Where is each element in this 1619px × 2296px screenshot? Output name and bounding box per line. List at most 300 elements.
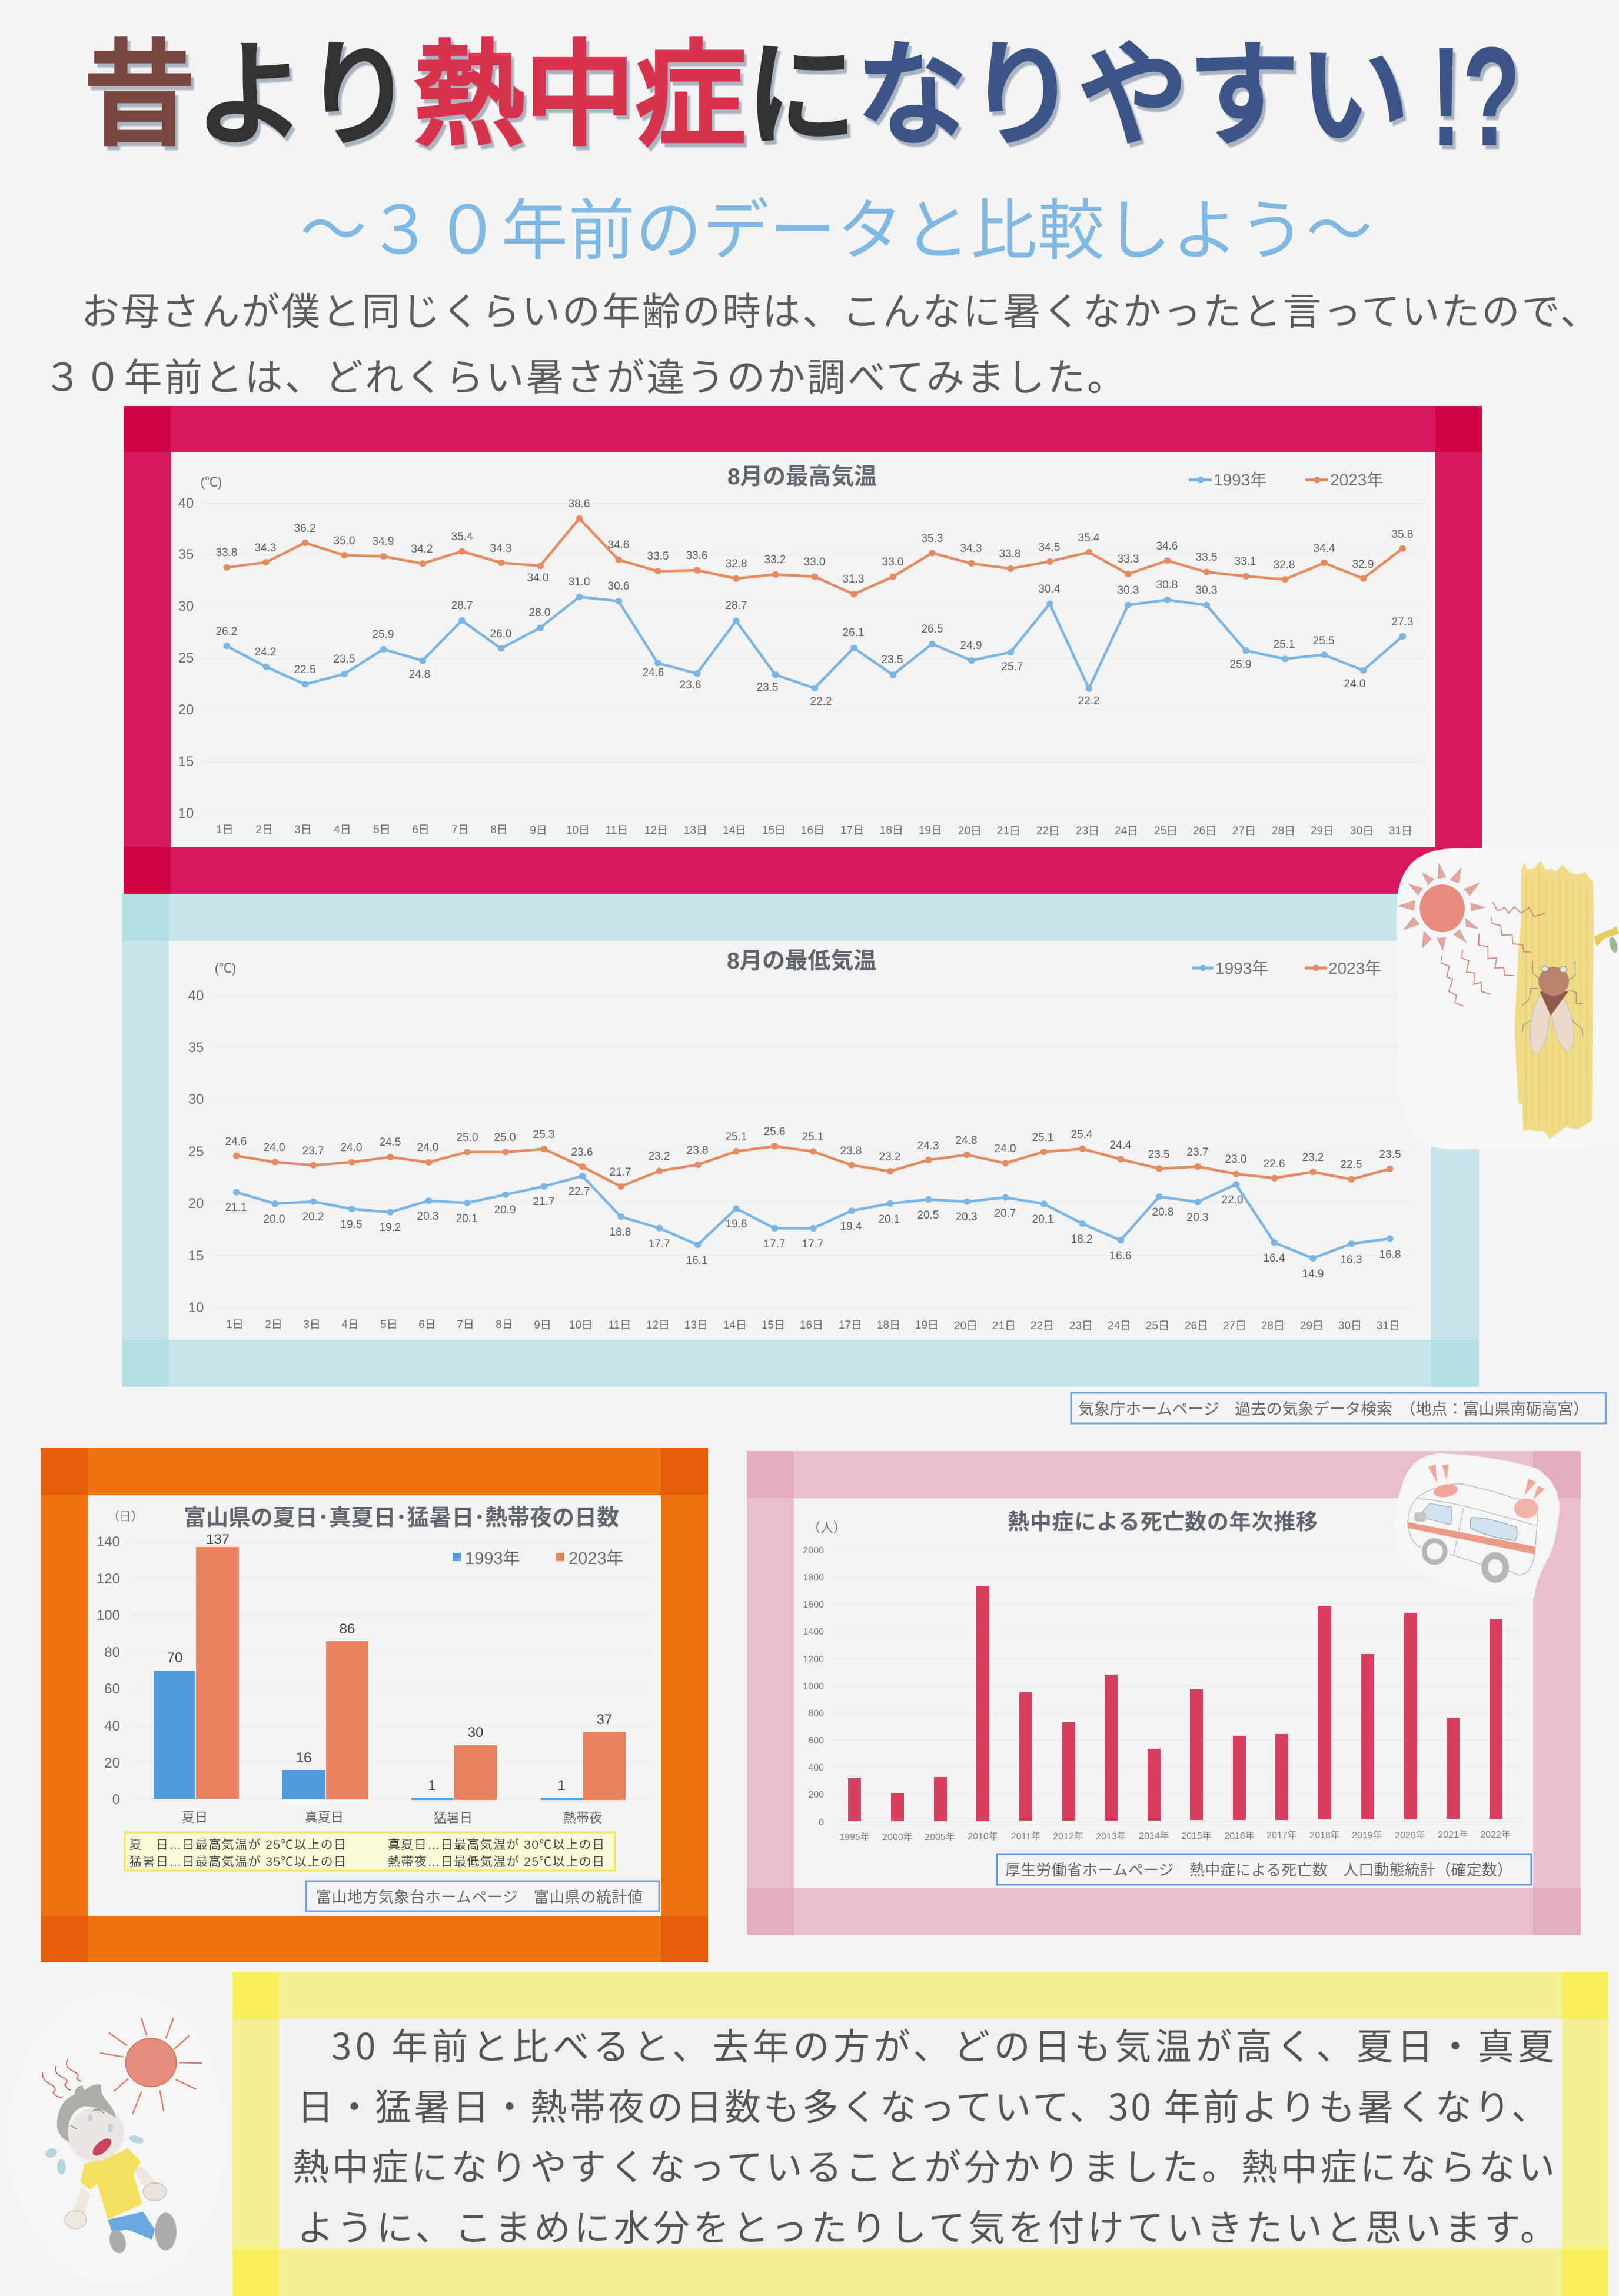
data labels 2023: 33.2 <box>764 554 786 566</box>
data labels 1993: 21.7 <box>533 1196 554 1208</box>
data labels 2023: 23.5 <box>1379 1149 1401 1161</box>
y axis: 1800 <box>803 1573 824 1583</box>
x axis days: 18日 <box>880 824 903 837</box>
data labels 2023: 34.2 <box>411 543 433 555</box>
intro text: お母さんが僕と同じくらいの年齢の時は、こんなに暑くなかったと言っていたので、 <box>81 281 1598 336</box>
x axis days: 28日 <box>1272 825 1295 837</box>
data labels 1993: 23.5 <box>882 654 903 666</box>
x axis days: 24日 <box>1108 1320 1131 1332</box>
bars <box>848 1586 1502 1821</box>
x axis years: 2011年 <box>1011 1831 1040 1842</box>
x axis days: 1日 <box>216 824 234 836</box>
y axis: 400 <box>808 1763 824 1773</box>
x axis years: 2010年 <box>968 1831 998 1842</box>
legend: 1993年 <box>465 1549 520 1568</box>
x axis days <box>216 824 1412 837</box>
title: !? <box>1430 18 1521 175</box>
data labels 1993: 30.4 <box>1039 583 1061 595</box>
data labels 1993: 20.1 <box>879 1213 900 1226</box>
x axis days: 21日 <box>997 825 1020 837</box>
data labels 1993: 25.9 <box>1230 658 1251 671</box>
data labels 2023: 24.0 <box>264 1142 285 1154</box>
y axis: 200 <box>808 1790 824 1800</box>
data labels 2023: 25.1 <box>802 1131 823 1143</box>
data labels 1993: 18.2 <box>1071 1233 1092 1246</box>
x axis years: 2020年 <box>1395 1830 1425 1841</box>
line 1993 <box>227 597 1403 689</box>
source note: weather agency: 気象庁ホームページ 過去の気象データ検索 （地点：富山県南砺高宮） <box>1078 1396 1589 1419</box>
data labels 1993: 24.9 <box>960 640 982 652</box>
data labels 2023: 34.9 <box>373 535 394 548</box>
data labels 2023: 34.3 <box>255 542 276 554</box>
chart title: 熱中症による死亡数の年次推移 <box>1008 1510 1318 1534</box>
data labels 2023: 25.6 <box>764 1126 785 1138</box>
x axis days: 26日 <box>1193 825 1216 837</box>
y axis: 1000 <box>803 1682 824 1692</box>
x axis days: 23日 <box>1076 825 1099 837</box>
bar values: 1 <box>428 1778 436 1793</box>
legend <box>1192 959 1381 977</box>
data labels 2023: 23.7 <box>302 1145 324 1157</box>
x axis years: 2005年 <box>925 1832 955 1842</box>
y axis: 100 <box>97 1608 120 1623</box>
bars 2023 <box>196 1547 626 1800</box>
data labels 1993: 25.5 <box>1313 635 1334 647</box>
data labels 2023: 23.2 <box>879 1151 900 1163</box>
x axis years <box>839 1829 1511 1842</box>
x axis days: 31日 <box>1389 825 1412 837</box>
bar values: 70 <box>167 1650 182 1666</box>
data labels 2023: 23.8 <box>840 1145 862 1157</box>
data labels 2023: 35.3 <box>922 533 943 545</box>
y axis: 30 <box>188 1092 204 1107</box>
data labels 1993: 25.7 <box>1002 661 1023 673</box>
data labels 1993: 26.2 <box>216 625 237 638</box>
data labels 2023: 24.3 <box>917 1140 939 1152</box>
bar values: 137 <box>206 1532 230 1548</box>
y axis: 1200 <box>803 1655 824 1665</box>
data labels 1993: 16.8 <box>1379 1249 1401 1261</box>
chart title: 8月の最高気温 <box>727 464 877 490</box>
data labels 2023: 33.3 <box>1118 553 1139 565</box>
bar values: 86 <box>340 1621 355 1637</box>
x axis days: 15日 <box>762 824 786 837</box>
x axis days: 19日 <box>919 824 942 837</box>
data labels 2023: 24.0 <box>417 1142 438 1154</box>
x axis days: 17日 <box>839 1319 862 1332</box>
bar values: 16 <box>296 1750 311 1766</box>
y axis: 40 <box>104 1718 120 1734</box>
data labels 1993: 25.9 <box>373 628 394 641</box>
data labels 1993: 23.6 <box>680 679 701 691</box>
x axis days: 12日 <box>644 824 668 837</box>
data labels 2023: 33.8 <box>999 548 1020 560</box>
data labels 1993: 19.5 <box>341 1219 362 1231</box>
x axis years: 2019年 <box>1352 1830 1382 1841</box>
data labels 2023: 25.0 <box>457 1132 478 1144</box>
data labels 1993: 24.6 <box>643 667 664 679</box>
data labels 2023: 23.6 <box>571 1146 593 1159</box>
data labels 1993: 22.5 <box>294 664 315 676</box>
data labels 1993: 28.0 <box>529 607 550 619</box>
data labels 2023: 25.0 <box>494 1132 516 1144</box>
data labels 1993: 20.3 <box>417 1210 438 1223</box>
y axis <box>178 475 222 821</box>
data labels 1993: 20.7 <box>995 1207 1016 1220</box>
data labels 2023: 23.7 <box>1187 1146 1208 1159</box>
data labels 1993: 17.7 <box>649 1238 670 1250</box>
x axis days: 27日 <box>1223 1320 1246 1332</box>
y axis: 1400 <box>803 1627 824 1637</box>
categories: 夏日 <box>182 1810 208 1825</box>
legend: 2023年 <box>1330 471 1383 489</box>
x axis days: 5日 <box>373 824 391 836</box>
y axis: 800 <box>808 1709 824 1719</box>
data labels 2023: 24.5 <box>380 1136 401 1149</box>
data labels 2023: 23.2 <box>649 1150 670 1163</box>
data labels 2023 <box>225 1126 1401 1179</box>
legend <box>453 1549 624 1568</box>
x axis days <box>226 1319 1400 1332</box>
x axis years: 2018年 <box>1309 1830 1340 1841</box>
data labels 1993 <box>216 576 1413 708</box>
data labels 1993: 20.2 <box>302 1211 324 1223</box>
x axis days: 23日 <box>1069 1320 1093 1332</box>
categories <box>182 1810 602 1825</box>
x axis days: 2日 <box>265 1319 282 1331</box>
data labels 2023: 25.1 <box>1032 1132 1053 1144</box>
chart title: 富山県の夏日･真夏日･猛暑日･熱帯夜の日数 <box>184 1506 619 1530</box>
data labels 2023: 34.6 <box>608 539 629 551</box>
data labels 1993: 20.9 <box>494 1204 516 1216</box>
data labels 1993: 16.3 <box>1341 1254 1362 1266</box>
x axis days: 13日 <box>684 824 707 837</box>
panel: number of hot days in Toyama <box>41 1448 708 1962</box>
x axis days: 13日 <box>684 1319 708 1332</box>
definitions box: 夏 日…日最高気温が 25℃以上の日 <box>129 1838 346 1852</box>
categories: 熱帯夜 <box>563 1811 602 1825</box>
x axis days: 4日 <box>341 1319 359 1331</box>
y axis: 60 <box>104 1681 120 1697</box>
light blue frame <box>122 894 1479 1387</box>
x axis years: 2016年 <box>1224 1831 1255 1841</box>
data labels 2023: 23.5 <box>1148 1149 1169 1161</box>
x axis days: 24日 <box>1115 825 1138 837</box>
conclusion text: 日・猛暑日・熱帯夜の日数も多くなっていて、30 年前よりも暑くなり、 <box>297 2078 1548 2131</box>
y axis: （日） <box>108 1510 143 1523</box>
data labels 2023: 35.4 <box>1078 532 1100 544</box>
data labels 2023: 32.8 <box>1274 559 1295 571</box>
definitions box <box>125 1832 615 1871</box>
bar values: 1 <box>557 1778 566 1793</box>
data labels 2023: 34.3 <box>490 543 511 555</box>
x axis days: 5日 <box>380 1319 398 1331</box>
data labels 2023: 33.5 <box>647 550 669 563</box>
data labels 1993: 20.5 <box>917 1209 939 1222</box>
line 2023 <box>237 1146 1390 1187</box>
data labels 1993: 14.9 <box>1302 1268 1324 1280</box>
data labels 1993: 17.7 <box>802 1238 823 1250</box>
x axis days: 31日 <box>1377 1320 1400 1332</box>
x axis days: 9日 <box>534 1319 551 1332</box>
data labels 2023: 32.8 <box>726 558 747 570</box>
x axis days: 18日 <box>877 1319 900 1332</box>
y axis: 25 <box>178 650 194 666</box>
x axis days: 29日 <box>1300 1320 1324 1332</box>
data labels 1993: 16.4 <box>1264 1252 1285 1265</box>
y axis: 600 <box>808 1736 824 1746</box>
x axis days: 17日 <box>840 824 864 837</box>
data labels 2023: 34.5 <box>1039 541 1060 554</box>
panel: heatstroke deaths by year <box>747 1451 1581 1935</box>
source note: Toyama observatory <box>306 1881 659 1911</box>
data labels 1993: 24.8 <box>409 668 430 681</box>
data labels 2023: 36.2 <box>294 523 315 535</box>
data labels 1993: 21.1 <box>225 1202 247 1214</box>
data labels 2023: 21.7 <box>610 1166 631 1179</box>
data labels 1993: 22.2 <box>1078 695 1099 707</box>
y axis: 40 <box>188 988 204 1004</box>
y axis: 25 <box>188 1144 204 1160</box>
data labels 1993: 19.2 <box>380 1222 401 1234</box>
y axis: 40 <box>178 495 194 511</box>
x axis days: 15日 <box>762 1319 785 1332</box>
y axis: 20 <box>104 1755 120 1771</box>
illustration: sun and cicada on tree <box>1397 846 1619 1149</box>
bar values <box>167 1532 612 1793</box>
data labels 1993: 20.3 <box>1187 1212 1208 1224</box>
panel: August minimum temperature <box>122 894 1479 1387</box>
x axis days: 8日 <box>490 824 508 836</box>
data labels 2023: 32.9 <box>1352 558 1374 571</box>
data labels 2023: 33.1 <box>1235 555 1256 568</box>
data labels 2023: 25.3 <box>533 1129 554 1141</box>
data labels 1993: 26.5 <box>922 623 943 635</box>
data labels 1993: 16.1 <box>686 1255 707 1267</box>
line 2023 <box>227 518 1403 595</box>
data labels 1993: 20.0 <box>264 1213 285 1226</box>
data labels 1993: 24.2 <box>255 646 276 658</box>
definitions box: 真夏日…日最高気温が 30℃以上の日 <box>388 1838 604 1852</box>
data labels 1993: 22.0 <box>1222 1194 1243 1206</box>
y axis: 10 <box>188 1300 204 1316</box>
y axis: 10 <box>178 806 194 821</box>
data labels 2023: 31.3 <box>843 573 864 585</box>
source note: health ministry <box>997 1854 1531 1885</box>
orange frame <box>41 1448 708 1962</box>
x axis days: 20日 <box>958 825 982 837</box>
data labels 2023: 34.3 <box>960 543 982 555</box>
data labels 2023: 24.0 <box>995 1143 1016 1155</box>
data labels 1993: 27.3 <box>1392 616 1413 628</box>
x axis days: 30日 <box>1350 825 1374 837</box>
crimson frame <box>124 406 1482 894</box>
data labels 2023 <box>216 498 1413 585</box>
data labels 2023: 34.6 <box>1156 540 1178 553</box>
source note: health ministry: 厚生労働省ホームページ 熱中症による死亡数 人口動態統計（確定数） <box>1005 1858 1512 1880</box>
y axis: 0 <box>819 1818 824 1828</box>
data labels 1993: 20.1 <box>456 1213 477 1225</box>
data labels 1993: 18.8 <box>610 1226 631 1239</box>
data labels 1993: 30.8 <box>1156 579 1178 591</box>
data labels 1993: 28.7 <box>451 600 473 612</box>
data labels 2023: 25.4 <box>1071 1129 1093 1141</box>
x axis days: 29日 <box>1311 825 1334 837</box>
x axis days: 25日 <box>1146 1320 1169 1332</box>
x axis days: 3日 <box>294 824 312 836</box>
x axis days: 9日 <box>530 824 547 837</box>
categories: 猛暑日 <box>434 1811 473 1825</box>
data labels 1993: 26.1 <box>843 627 864 639</box>
y axis <box>97 1510 143 1808</box>
data labels 1993 <box>225 1186 1401 1280</box>
data labels 1993: 24.0 <box>1344 678 1365 690</box>
x axis years: 1995年 <box>839 1832 870 1842</box>
conclusion text: ように、こまめに水分をとったりして気を付けていきたいと思います。 <box>297 2198 1557 2251</box>
data labels 2023: 24.8 <box>956 1134 977 1147</box>
bar values: 30 <box>468 1725 483 1741</box>
x axis days: 8日 <box>496 1319 513 1331</box>
x axis years: 2013年 <box>1096 1831 1126 1842</box>
data labels 1993: 19.4 <box>840 1220 862 1233</box>
x axis years: 2012年 <box>1053 1831 1083 1842</box>
yellow frame <box>232 1972 1608 2296</box>
legend: 1993年 <box>1214 471 1266 489</box>
data labels 1993: 23.5 <box>757 681 778 694</box>
data labels 2023: 35.4 <box>451 531 473 543</box>
illustration: boy with heatstroke <box>8 1990 228 2286</box>
x axis days: 3日 <box>303 1319 321 1331</box>
conclusion text: 30 年前と比べると、去年の方が、どの日も気温が高く、夏日・真夏 <box>331 2017 1554 2070</box>
x axis days: 25日 <box>1154 825 1178 837</box>
y axis: 80 <box>104 1645 120 1661</box>
x axis days: 11日 <box>609 1319 631 1332</box>
x axis years: 2015年 <box>1181 1831 1212 1841</box>
panel: conclusion <box>232 1972 1608 2296</box>
x axis years: 2017年 <box>1266 1830 1297 1841</box>
y axis <box>803 1520 846 1828</box>
data labels 2023: 23.2 <box>1302 1152 1324 1164</box>
data labels 2023: 33.0 <box>804 556 825 568</box>
legend: 1993年 <box>1215 959 1268 977</box>
y axis: 20 <box>178 702 194 718</box>
data labels 2023: 25.1 <box>726 1131 747 1143</box>
data labels 2023: 22.6 <box>1264 1158 1285 1170</box>
y axis: 2000 <box>803 1546 824 1556</box>
x axis years: 2000年 <box>882 1832 913 1842</box>
x axis days: 16日 <box>800 1319 823 1332</box>
x axis days: 22日 <box>1036 825 1060 837</box>
data labels 1993: 26.0 <box>490 628 511 640</box>
x axis days: 19日 <box>915 1319 939 1332</box>
data labels 2023: 34.0 <box>527 572 548 584</box>
panel: August maximum temperature <box>124 406 1482 894</box>
data labels 1993: 23.5 <box>334 653 355 665</box>
data labels 1993: 25.1 <box>1274 638 1295 651</box>
data labels 2023: 22.5 <box>1341 1159 1362 1171</box>
x axis days: 26日 <box>1185 1320 1208 1332</box>
x axis days: 14日 <box>723 1319 747 1332</box>
data labels 1993: 31.0 <box>569 576 590 588</box>
data labels 2023: 33.5 <box>1196 551 1217 564</box>
y axis: 15 <box>178 754 194 770</box>
x axis days: 21日 <box>992 1320 1016 1332</box>
data labels 2023: 38.6 <box>569 498 590 510</box>
intro text <box>44 281 1598 402</box>
data labels 1993: 19.6 <box>726 1218 747 1230</box>
conclusion text: 熱中症になりやすくなっていることが分かりました。熱中症にならない <box>292 2138 1555 2191</box>
x axis days: 14日 <box>723 824 746 837</box>
x axis days: 22日 <box>1030 1320 1054 1332</box>
y axis: 15 <box>188 1248 204 1264</box>
x axis days: 28日 <box>1261 1320 1285 1332</box>
data labels 1993: 20.3 <box>956 1211 977 1223</box>
data labels 2023: 23.8 <box>687 1144 708 1157</box>
y axis: 30 <box>178 598 194 614</box>
y axis: 140 <box>97 1534 120 1550</box>
data labels 2023: 24.6 <box>225 1136 247 1148</box>
data labels 2023: 24.4 <box>1110 1139 1132 1152</box>
y axis <box>188 961 236 1316</box>
x axis days: 7日 <box>457 1319 474 1331</box>
x axis days: 20日 <box>954 1320 978 1332</box>
data labels 1993: 30.3 <box>1196 584 1217 597</box>
x axis years: 2021年 <box>1438 1829 1468 1840</box>
data labels 2023: 33.8 <box>216 547 237 559</box>
y axis: （人） <box>807 1520 846 1535</box>
legend: 2023年 <box>569 1549 624 1568</box>
data labels 2023: 33.6 <box>686 550 707 562</box>
data labels 2023: 34.4 <box>1314 543 1335 555</box>
data labels 1993: 22.7 <box>569 1186 590 1198</box>
x axis days: 4日 <box>334 824 351 836</box>
x axis years: 2022年 <box>1480 1829 1511 1840</box>
data labels 2023: 35.0 <box>334 535 355 547</box>
y axis: (℃) <box>215 961 236 976</box>
x axis days: 10日 <box>569 1319 593 1332</box>
data labels 2023: 33.0 <box>882 556 903 568</box>
definitions box: 熱帯夜…日最低気温が 25℃以上の日 <box>388 1855 604 1869</box>
legend <box>1189 471 1383 489</box>
x axis years: 2014年 <box>1139 1831 1169 1841</box>
x axis days: 12日 <box>646 1319 670 1332</box>
y axis: 1600 <box>803 1600 824 1610</box>
data labels 2023: 23.0 <box>1225 1153 1246 1166</box>
x axis days: 1日 <box>226 1319 244 1331</box>
bars 1993 <box>154 1671 583 1800</box>
definitions box: 猛暑日…日最高気温が 35℃以上の日 <box>129 1855 346 1869</box>
chart title: 8月の最低気温 <box>727 949 876 974</box>
y axis: 20 <box>188 1196 204 1212</box>
data labels 1993: 17.7 <box>764 1238 785 1250</box>
data labels 1993: 28.7 <box>726 600 747 612</box>
y axis: 35 <box>188 1040 204 1056</box>
pink frame <box>747 1451 1581 1935</box>
x axis days: 2日 <box>255 824 273 836</box>
y axis: 0 <box>112 1792 120 1808</box>
data labels 1993: 20.1 <box>1032 1213 1053 1226</box>
y axis: 35 <box>178 547 194 563</box>
x axis days: 30日 <box>1338 1320 1362 1332</box>
intro text: ３０年前とは、どれくらい暑さが違うのか調べてみました。 <box>44 347 1125 402</box>
x axis days: 16日 <box>801 824 825 837</box>
data labels 1993: 30.3 <box>1118 584 1139 597</box>
subtitle: ～３０年前のデータと比較しよう～ <box>300 177 1372 273</box>
x axis days: 11日 <box>606 824 628 837</box>
bar values: 37 <box>597 1712 612 1728</box>
data labels 2023: 24.0 <box>341 1142 362 1154</box>
x axis days: 27日 <box>1232 825 1256 837</box>
